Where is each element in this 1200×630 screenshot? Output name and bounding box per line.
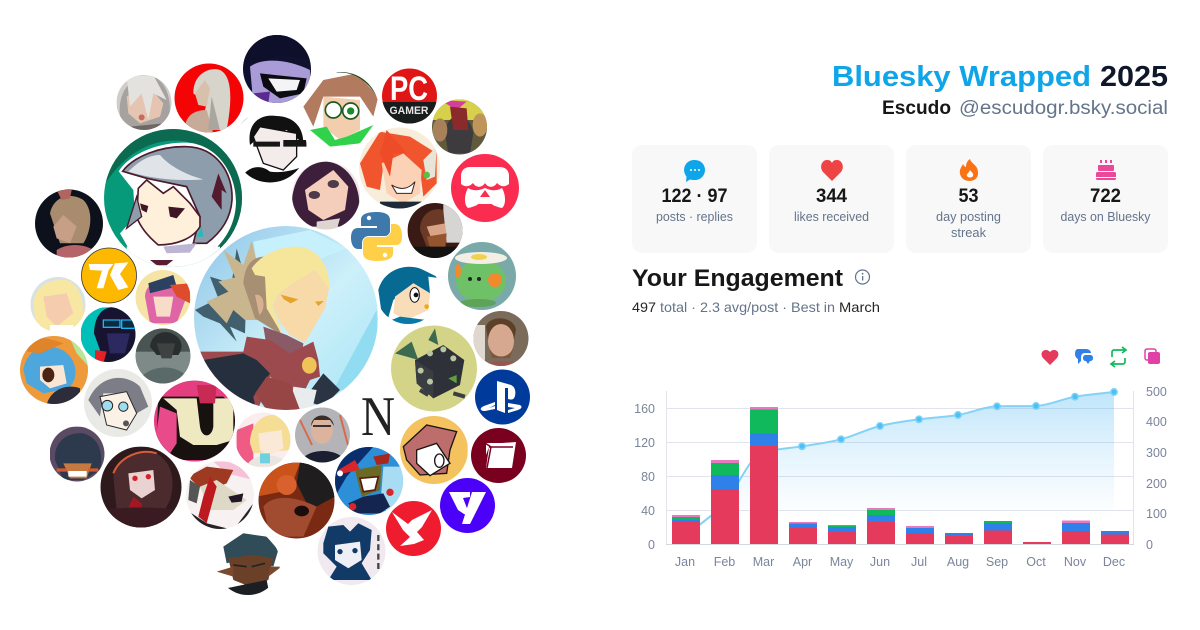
panel: days on Bluesky: 722 [1090, 186, 1121, 207]
avatar: brown hair elf with green [302, 72, 380, 148]
avatar cluster [20, 35, 530, 597]
avatar: pink haired character [135, 270, 192, 327]
panel: posts and replies [632, 145, 757, 253]
month labels: Jun [870, 555, 890, 569]
user name and handle [882, 98, 1168, 119]
engagement summary [632, 299, 880, 315]
avatar: PC Gamer logo: PC [390, 70, 428, 108]
icon: quotes legend squares [1145, 349, 1160, 364]
left axis labels: 0 [648, 538, 655, 552]
avatar: man with glasses portrait [295, 407, 351, 463]
avatar: red eagle logo [386, 501, 441, 556]
cumulative area [685, 392, 1114, 544]
icon: info [856, 270, 870, 284]
left axis labels: 160 [634, 402, 655, 416]
avatar: purple hair girl [292, 161, 360, 230]
right axis labels: 300 [1146, 446, 1167, 460]
month labels: Sep [986, 555, 1008, 569]
avatar: PlayStation logo [475, 370, 530, 424]
avatar: blue hair orange hood [20, 336, 89, 407]
avatar: black and white man with glasses [240, 116, 306, 182]
cumulative line [685, 392, 1114, 536]
icon: python logo [351, 212, 402, 261]
month labels [675, 555, 1125, 569]
icon: replies legend bubbles [1075, 349, 1093, 364]
panel: likes received [769, 145, 894, 253]
icon: birthday cake [1096, 160, 1116, 180]
chart grid and axes [666, 391, 1134, 544]
title: Bluesky Wrapped [832, 61, 1091, 93]
month labels: Nov [1064, 555, 1087, 569]
avatar: horned character with red hair [186, 461, 254, 530]
left axis labels: 80 [641, 470, 655, 484]
user name and handle: Escudo [882, 98, 951, 119]
avatar: yellow letter U on pink [153, 379, 237, 462]
panel: days on Bluesky [1043, 145, 1168, 253]
avatar: blue haired cartoon [378, 266, 437, 324]
avatar: man with beard photo [473, 311, 529, 367]
avatar: blonde woman on dark [35, 189, 103, 260]
avatar: green teal character [104, 129, 242, 267]
chart legend icons [1042, 347, 1160, 367]
icon: flame [960, 159, 978, 181]
right axis labels: 500 [1146, 385, 1167, 399]
month labels: Jan [675, 555, 695, 569]
month labels: Dec [1103, 555, 1125, 569]
right axis labels [1146, 385, 1167, 552]
month labels: May [830, 555, 854, 569]
avatar: comic book cover [432, 99, 488, 156]
avatar: purple grinning character [242, 35, 312, 103]
avatar: bearded man [408, 203, 464, 260]
title: 2025 [1100, 61, 1168, 93]
panel: day posting streak: day posting [936, 210, 1001, 224]
month labels: Aug [947, 555, 969, 569]
engagement summary: March [839, 299, 880, 315]
avatar: red-eyed dark hair girl [100, 447, 183, 530]
panel: day posting streak [906, 145, 1031, 253]
left axis labels: 120 [634, 436, 655, 450]
panel: posts and replies: 122 · 97 [662, 186, 728, 207]
avatar: small blonde chibi [235, 412, 292, 469]
panel: likes received: likes received [794, 210, 869, 224]
engagement chart [634, 385, 1167, 569]
avatar: dark grey character [135, 328, 192, 385]
month labels: Apr [793, 555, 812, 569]
right axis labels: 0 [1146, 538, 1153, 552]
panel: days on Bluesky: days on Bluesky [1060, 210, 1151, 224]
avatar: green plush frog [448, 242, 516, 310]
user name and handle: @escudogr.bsky.social [959, 98, 1168, 119]
panel: likes received: 344 [816, 186, 847, 207]
avatar: blurry dark orange face [257, 463, 335, 539]
month labels: Oct [1026, 555, 1046, 569]
engagement summary: 497 [632, 299, 656, 315]
left axis labels: 40 [641, 504, 655, 518]
panel: posts and replies: posts · replies [656, 210, 733, 224]
avatar: blue ink girl [318, 517, 386, 585]
avatar: itch.io logo [451, 154, 519, 222]
avatar: white-haired girl on red [173, 63, 245, 133]
quotes bars [672, 407, 1090, 528]
right axis labels: 200 [1146, 477, 1167, 491]
avatar: PC Gamer logo: GAMER [390, 105, 429, 117]
engagement summary: total · 2.3 avg/post · Best in [660, 299, 835, 315]
panel: day posting streak: streak [951, 226, 987, 240]
replies bars [672, 434, 1129, 536]
avatar: maroon box logo [471, 428, 526, 483]
avatar: PC Gamer logo [382, 68, 438, 124]
avatar: dice dragon on yellow-green [390, 325, 477, 412]
month labels: Feb [714, 555, 735, 569]
avatar: pale blonde girl [30, 277, 87, 333]
avatar: smiling cat-ear character [50, 427, 105, 482]
icon: heart [821, 160, 843, 181]
heading: your engagement: Your Engagement [632, 265, 843, 292]
avatar: grey-haired girl [117, 75, 173, 132]
avatar: pink hair face on orange swirl [399, 416, 468, 484]
avatar: jester monster on blue [335, 447, 404, 515]
panel: day posting streak: 53 [958, 186, 978, 207]
reposts bars [672, 410, 1012, 527]
avatar: vader with sunglasses [81, 307, 137, 363]
avatar: red haired smiling girl [358, 127, 440, 210]
avatar: violet V logo [440, 478, 495, 533]
icon: letter N logo: N [361, 386, 395, 448]
month labels: Jul [911, 555, 927, 569]
icon: reposts legend arrows [1111, 347, 1126, 367]
icon: chat bubble [684, 160, 705, 182]
left axis labels [634, 402, 655, 552]
right axis labels: 100 [1146, 507, 1167, 521]
avatar: grey hair girl with glasses [83, 369, 152, 437]
avatar: dark skinned elf [217, 532, 282, 597]
icon: likes legend heart [1042, 350, 1058, 365]
avatar: main profile, blonde with red collar [190, 223, 380, 413]
right axis labels: 400 [1146, 415, 1167, 429]
month labels: Mar [753, 555, 774, 569]
avatar: yellow logo [82, 248, 137, 303]
likes bars [672, 446, 1129, 544]
cumulative points [799, 389, 1117, 449]
